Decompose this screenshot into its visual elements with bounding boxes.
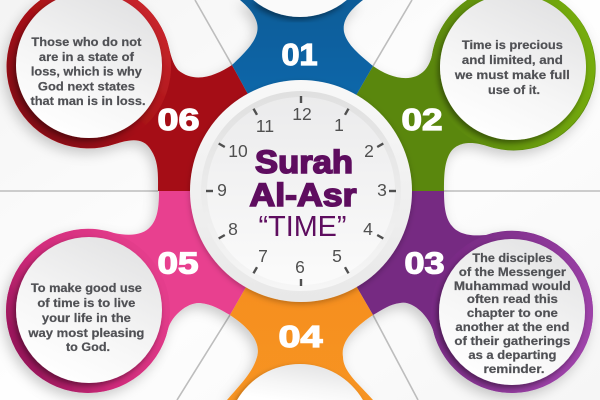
text 06: loss, which is why — [31, 66, 143, 78]
text 03: of the Messenger — [459, 267, 566, 279]
panel 04 circle — [237, 364, 363, 400]
text 02: and limited, and — [462, 55, 563, 67]
number 05: 05 — [158, 246, 198, 280]
clock numerals: 4 — [363, 219, 373, 239]
clock — [190, 80, 412, 302]
panel 06 circle — [16, 0, 162, 138]
text 03: chapter to one — [467, 308, 558, 320]
text 06: that man is in loss. — [30, 96, 146, 108]
text 03: another at the end — [455, 322, 569, 334]
title: “TIME” — [258, 211, 346, 243]
clock numerals: 1 — [334, 115, 344, 135]
text 05: to God. — [66, 342, 110, 354]
panel 05 circle — [16, 237, 162, 383]
number 02: 02 — [402, 102, 442, 137]
text 03: Muhammad would — [454, 281, 571, 293]
clock ticks — [206, 96, 396, 286]
text 05: To make good use — [31, 283, 142, 295]
title — [250, 144, 356, 243]
text 03: reminder. — [484, 364, 544, 376]
text 06: are in a state of — [39, 52, 134, 64]
text 03: often read this — [467, 294, 558, 306]
clock numerals: 3 — [377, 180, 387, 200]
number 03: 03 — [404, 246, 444, 280]
number 04: 04 — [278, 319, 323, 354]
clock rim — [190, 80, 412, 302]
text 02: we must make full — [454, 70, 570, 82]
title: Surah — [255, 144, 353, 180]
clock numerals: 9 — [217, 180, 227, 200]
number 06: 06 — [158, 102, 200, 137]
lobe 05 pink — [0, 191, 246, 400]
clock numerals: 7 — [258, 246, 268, 266]
clock numerals: 6 — [295, 257, 305, 277]
text 02: use of it. — [488, 85, 540, 97]
title: Al-Asr — [250, 177, 356, 213]
text 03: as a departing — [468, 350, 556, 362]
text 06: Those who do not — [31, 37, 142, 49]
clock numerals: 10 — [228, 141, 248, 161]
lobe 04 orange — [224, 287, 373, 400]
text 05: your life in the — [42, 313, 131, 325]
lobe 03 purple — [301, 191, 593, 393]
text 03: of their gatherings — [454, 336, 570, 348]
text 05: way most pleasing — [27, 328, 144, 340]
lobe 02 green — [356, 0, 598, 194]
panel 01 circle — [253, 0, 347, 17]
clock numerals: 12 — [292, 104, 312, 124]
text 05: of time is to live — [37, 298, 135, 310]
lobe 06 red — [0, 0, 248, 200]
text 03: The disciples — [472, 253, 552, 265]
clock numerals: 8 — [228, 219, 238, 239]
clock numerals: 11 — [256, 116, 274, 136]
text 06: God next states — [38, 82, 135, 94]
clock numerals — [217, 104, 387, 277]
panel 03 circle — [439, 239, 585, 385]
panel 02 circle — [440, 0, 586, 140]
text 02: Time is precious — [462, 40, 563, 52]
lobe 01 blue — [226, 0, 373, 95]
number 01: 01 — [282, 37, 318, 72]
clock numerals: 5 — [332, 246, 342, 266]
clock numerals: 2 — [364, 141, 374, 161]
